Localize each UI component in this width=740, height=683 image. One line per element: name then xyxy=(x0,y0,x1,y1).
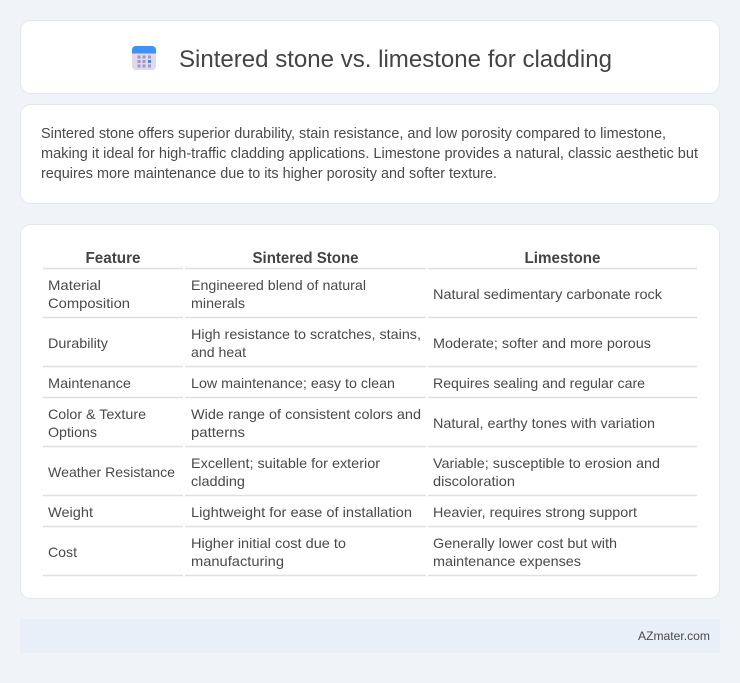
table header: Limestone xyxy=(524,250,601,267)
row: weather resistance: Excellent; suitable for exterior xyxy=(191,455,380,471)
row: weight: Heavier, requires strong support xyxy=(433,504,637,520)
row: material composition xyxy=(43,277,697,318)
row: color and texture options: Wide range of consistent colors and xyxy=(191,406,421,422)
row: durability: Durability xyxy=(48,335,108,351)
row: maintenance: Requires sealing and regular care xyxy=(433,375,645,391)
row: weather resistance: Weather Resistance xyxy=(48,464,175,480)
row: weather resistance xyxy=(43,455,697,496)
row: durability xyxy=(43,326,697,366)
row: durability: Moderate; softer and more porous xyxy=(433,335,651,351)
footer bar xyxy=(20,619,720,653)
table header xyxy=(43,250,697,268)
row: durability: and heat xyxy=(191,344,246,360)
row: color and texture options: Color & Texture xyxy=(48,406,146,422)
title: Sintered stone vs. limestone for cladding xyxy=(179,46,612,73)
row: weather resistance: discoloration xyxy=(433,473,515,489)
row: weight xyxy=(43,504,697,526)
footer credit: AZmater.com xyxy=(638,629,710,643)
summary text: making it ideal for high-traffic cladding applications. Limestone provides a natural, classic aesthetic but xyxy=(41,146,698,162)
row: cost: Cost xyxy=(48,544,77,560)
table header: Sintered Stone xyxy=(252,250,359,267)
row: durability: High resistance to scratches, stains, xyxy=(191,326,421,342)
row: color and texture options: Natural, earthy tones with variation xyxy=(433,415,655,431)
row: weight: Weight xyxy=(48,504,93,520)
row: weight: Lightweight for ease of installation xyxy=(191,504,412,520)
row: material composition: Material xyxy=(48,277,101,293)
panel: title card xyxy=(20,20,720,94)
summary text: Sintered stone offers superior durability, stain resistance, and low porosity compared to limestone, xyxy=(41,126,666,142)
row: cost: maintenance expenses xyxy=(433,553,581,569)
row: cost: Generally lower cost but with xyxy=(433,535,617,551)
panel: summary xyxy=(20,104,720,204)
row: material composition: Engineered blend of natural xyxy=(191,277,366,293)
row: cost xyxy=(43,535,697,576)
row: maintenance: Low maintenance; easy to clean xyxy=(191,375,395,391)
row: material composition: Natural sedimentary carbonate rock xyxy=(433,286,663,302)
row: maintenance xyxy=(43,375,697,398)
table header: Feature xyxy=(86,250,141,267)
row: weather resistance: Variable; susceptible to erosion and xyxy=(433,455,660,471)
row: color and texture options: patterns xyxy=(191,424,245,440)
summary text: requires more maintenance due to its higher porosity and softer texture. xyxy=(41,166,497,182)
row: cost: manufacturing xyxy=(191,553,284,569)
row: maintenance: Maintenance xyxy=(48,375,131,391)
summary text xyxy=(41,126,698,182)
icon: calendar xyxy=(132,46,156,70)
row: cost: Higher initial cost due to xyxy=(191,535,346,551)
panel: comparison table xyxy=(20,224,720,598)
row: weather resistance: cladding xyxy=(191,473,245,489)
row: color and texture options: Options xyxy=(48,424,97,440)
row: material composition: Composition xyxy=(48,295,130,311)
row: color and texture options xyxy=(43,406,697,446)
row: material composition: minerals xyxy=(191,295,245,311)
